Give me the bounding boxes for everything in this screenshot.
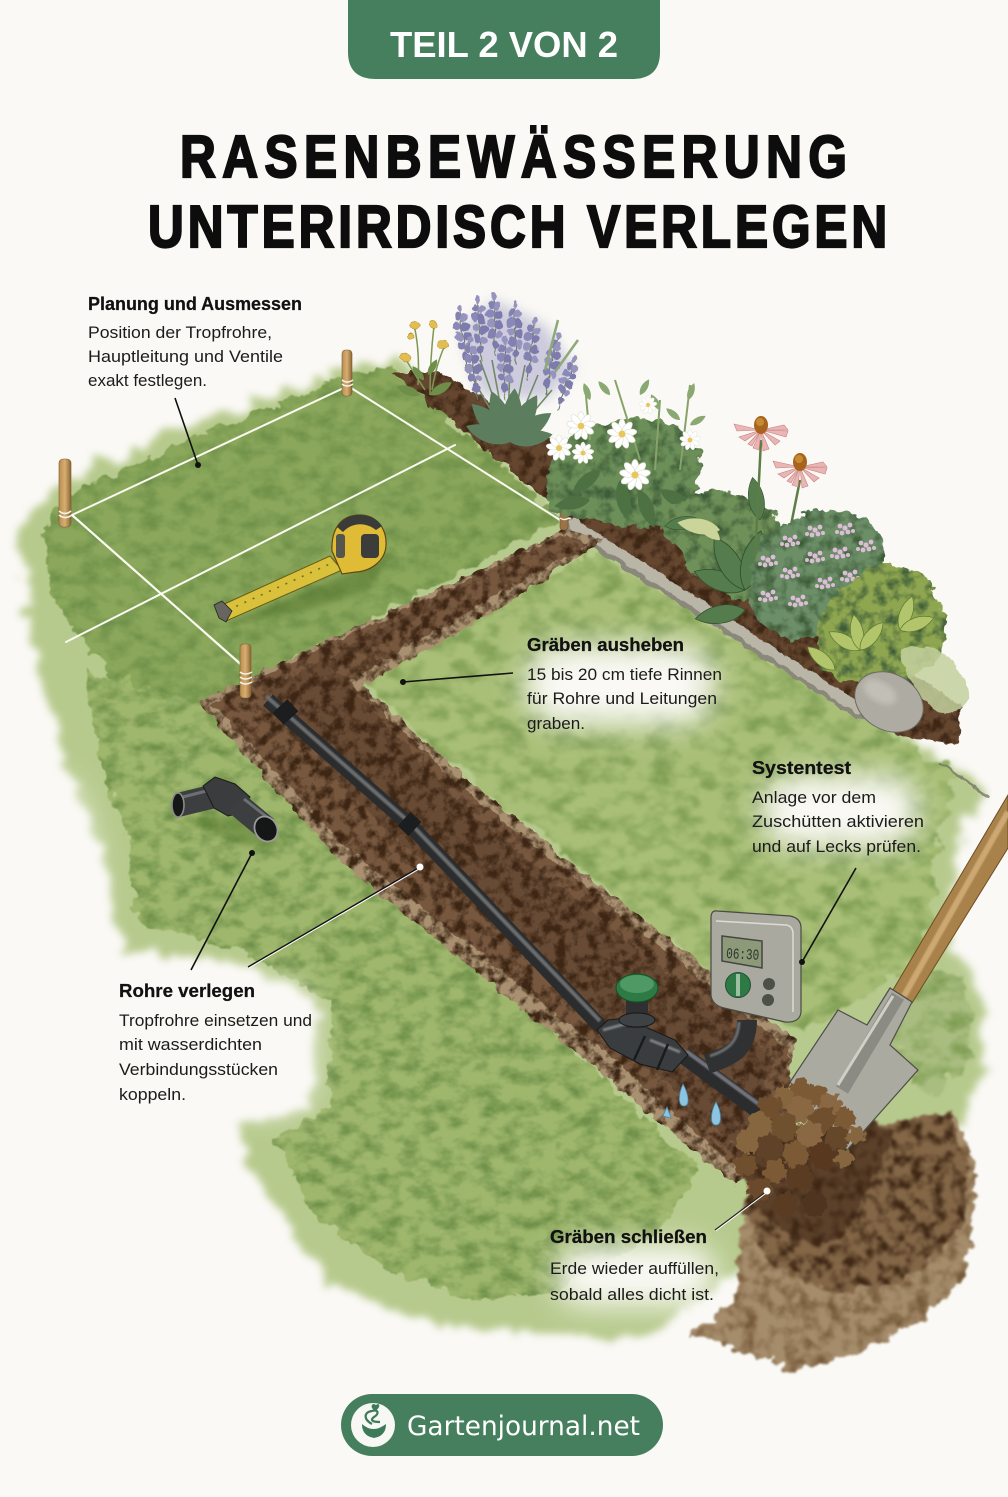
shovel [734,795,1008,1218]
mid soil [745,1112,968,1290]
title [148,124,887,260]
yellow flowers [395,320,454,399]
label: Gräben schließen [550,1227,719,1304]
banner: part indicator [348,0,660,79]
stake: left [59,459,72,527]
label: Systentest: Systentest [752,758,851,778]
label: Gräben ausheben: für Rohre und Leitungen [527,690,717,708]
flower bed plants [395,292,970,744]
leader: Gräben schließen [715,1188,770,1231]
label: Systentest: und auf Lecks prüfen. [752,838,921,856]
title: RASENBEWÄSSERUNG [180,124,847,190]
leader: Systentest [799,868,856,965]
label: Systentest: Zuschütten aktivieren [752,813,924,831]
lilac flowers shrub [750,510,885,641]
footer badge [341,1394,663,1456]
label: Gräben schließen: sobald alles dicht ist. [550,1286,714,1304]
broad leaf plants [660,476,786,628]
label: Planung und Ausmessen: Hauptleitung und Ventile [88,348,283,366]
label: Planung und Ausmessen [88,294,302,390]
label: Planung und Ausmessen: Position der Tropfrohre, [88,324,272,342]
label: Systentest: Anlage vor dem [752,789,876,807]
stake: top [342,350,353,396]
white daisies shrub [546,378,707,530]
label: Planung und Ausmessen: Planung und Ausmessen [88,294,302,314]
icon: loose pipe elbow [172,777,285,848]
lawn pale wash [18,356,985,1340]
lawn: planning area [42,368,560,705]
dark soil core [735,1120,895,1240]
label: Rohre verlegen: koppeln. [119,1086,186,1104]
illustration: garden scene [15,292,1008,1370]
water drops [663,1084,720,1125]
icon: irrigation timer: 06:30 [726,946,760,965]
yellow-green leafy plant [803,563,970,715]
lawn: lower left [85,670,700,1300]
leader: Planung [175,398,201,468]
label: Gräben schließen: Gräben schließen [550,1227,707,1247]
label: Planung und Ausmessen: exakt festlegen. [88,372,207,390]
pale wash halos behind labels [15,645,1008,1305]
leader: Gräben ausheben [400,673,513,685]
shovel handle [893,795,1008,1003]
label: Gräben ausheben: Gräben ausheben [527,635,684,655]
soil on shovel and pile of clods [734,1078,864,1218]
leader: Rohre to pipe [248,864,424,968]
pale soil wash [690,1112,978,1370]
label: Gräben ausheben: 15 bis 20 cm tiefe Rinnen [527,666,722,684]
leader: Rohre to elbow [191,850,255,970]
trench darker core [270,538,775,1150]
layout strings [66,386,560,668]
trench soil floor [212,534,790,1176]
icon: sprout logo [351,1403,395,1447]
stake: front [240,644,252,698]
shovel blade [790,988,918,1150]
label: Gräben ausheben [527,635,722,733]
garden stone [844,660,934,744]
label: Gräben schließen: Erde wieder auffüllen, [550,1260,719,1278]
label: Rohre verlegen: mit wasserdichten [119,1036,262,1054]
main pipe [266,696,760,1110]
icon: irrigation timer [711,911,801,1022]
label: Rohre verlegen: Rohre verlegen [119,981,255,1001]
footer badge: Gartenjournal.net [407,1411,640,1442]
label: Systentest [752,758,924,856]
edging stones [572,524,988,797]
valve with green cap [597,974,688,1072]
label: Rohre verlegen: Verbindungsstücken [119,1061,278,1079]
label: Rohre verlegen: Tropfrohre einsetzen und [119,1012,312,1030]
right lawn fade near edge [890,960,975,1095]
title: UNTERIRDISCH VERLEGEN [148,194,887,260]
trench [198,530,796,1186]
soil heap at trench end [690,1112,978,1370]
label: Rohre verlegen [119,981,312,1104]
lawn: right of trench [360,552,955,1035]
coneflowers [734,416,827,560]
label: Gräben ausheben: graben. [527,715,585,733]
flower bed soil [392,372,960,745]
stake: right [560,498,569,530]
icon: tape measure [214,515,392,626]
banner: part indicator: TEIL 2 VON 2 [390,24,618,65]
riser pipe to timer [707,1020,747,1064]
trench tan banks [198,530,796,1186]
lavender [451,292,583,450]
